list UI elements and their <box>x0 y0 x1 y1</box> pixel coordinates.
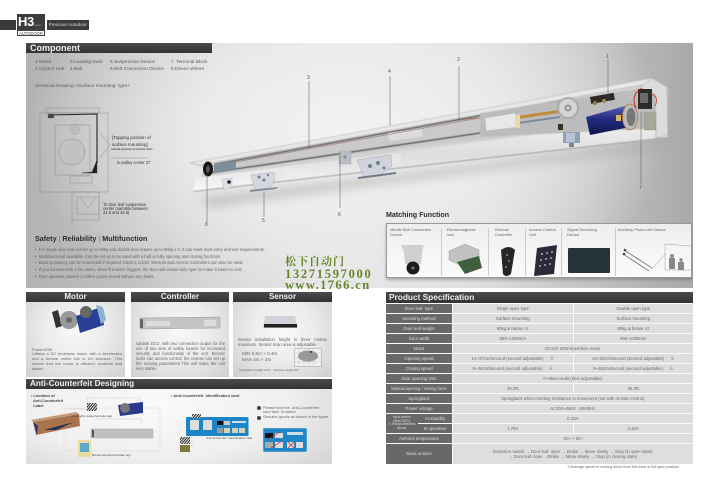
table: product specification: DC24V 60W brushless motor <box>545 346 601 351</box>
table: product specification: Door opening time <box>401 376 437 381</box>
heading: motor <box>26 292 125 302</box>
bracket 5 <box>250 171 284 192</box>
diagram: label locations <box>31 398 160 457</box>
table: product specification: ※ except detection sensor <box>388 422 415 430</box>
door leaf note: To door leaf suspension <box>103 202 146 207</box>
watermark: www.1766.cn <box>285 278 371 292</box>
table: product specification: Closing speed <box>405 366 433 371</box>
heading: safety: Safety | Reliability | Multifunction <box>35 234 147 243</box>
text: bi-color: Bi-color layering Anti-fake sign <box>92 452 131 456</box>
number labels: 8 <box>205 222 208 228</box>
feature bullets: • Multifunctional available. Can be set up to be used with a half or fully opening and closing functions. <box>35 254 221 259</box>
text: sensor range <box>242 351 277 362</box>
heading: controller: Controller <box>161 292 199 301</box>
text: sensor range: MIN 0.5m × 0.4m <box>242 351 277 356</box>
table: product specification: Single open type <box>497 306 529 311</box>
feature bullets: • Door operator passed 1 million cycles tested without any faults. <box>35 274 155 279</box>
table: product specification: Motor <box>414 346 424 351</box>
panel: matching function: Access Control <box>529 227 556 232</box>
table: product specification: In operation <box>424 426 446 431</box>
text: installation height: Installation height:2.2m Antenna angle:30° <box>239 368 299 372</box>
panel: controller <box>131 292 229 377</box>
table: product specification: Detection switch → Door leaf open → Brake → Move slowly → Stop (in open state) <box>493 449 653 454</box>
number labels <box>205 54 642 228</box>
panel: matching function: Remote <box>495 227 509 232</box>
table: product specification: 30.3N <box>507 386 518 391</box>
panel: matching function: Controller <box>495 232 512 237</box>
panel: matching function: Device <box>567 232 579 237</box>
table: product specification: 9~30cm/Second (second adjustable) ※ <box>593 366 673 371</box>
bracket 6 <box>339 151 351 164</box>
text: motor: Utilises a DC brushless motor, with a decelerator and a turbine vortex bar in it's structure. This means that the motor is efficient, powerful and stable. <box>32 351 122 371</box>
panel: matching function: Signal Receiving <box>567 227 597 232</box>
table: product specification: -20~ + 50~ <box>562 436 583 441</box>
table: product specification: 1.76A <box>507 426 518 431</box>
header badge <box>0 14 89 36</box>
number labels: 3 <box>307 75 310 81</box>
door leaf note <box>103 202 148 215</box>
watermark: 松下自动门 <box>285 256 345 268</box>
text: identification card title: • Anti-Counterfeit Identification card <box>171 392 239 398</box>
table: product specification: At standby <box>425 416 445 421</box>
table: product specification: Door leaf type <box>405 306 433 311</box>
table: product specification: 900~1265mm <box>500 336 526 341</box>
table: product specification: Basic actions <box>406 451 432 456</box>
table: product specification: 14~37cm/Second (second adjustable) ※ <box>471 356 554 361</box>
bracket suspension <box>357 154 401 179</box>
text: card instructions: Please hold the Anti-Counterfeit <box>263 404 319 410</box>
table: product specification: Surface mounting <box>496 316 530 321</box>
parts list: 8 Driven Wheel <box>171 67 204 72</box>
watermark <box>285 256 372 292</box>
number labels: 1 <box>606 54 609 60</box>
table: product specification: Surface mounting <box>616 316 650 321</box>
number labels: 2 <box>457 57 460 63</box>
feature bullets: • If you connect with a fire alarm, when fire alarm triggers, the door will remain fully open to make it easier to exit. <box>35 267 242 272</box>
sectional drawing <box>40 108 154 226</box>
driven wheel <box>203 161 236 190</box>
heading: component: Component <box>30 43 80 53</box>
parts list: 5 Suspension Device <box>110 60 155 65</box>
table: product specification: 0.23A <box>567 416 578 421</box>
parts list: 4 Belt <box>70 67 82 72</box>
text: motor: Power:60W <box>32 346 52 352</box>
heading: motor: Motor <box>64 292 87 301</box>
parts list: 6 Belt Connection Device <box>110 67 164 72</box>
control strip <box>388 109 565 141</box>
number labels: 4 <box>388 69 391 75</box>
heading: anti-counterfeit: Anti-Counterfeit Designing <box>30 379 134 388</box>
table: product specification: Springback <box>408 396 430 401</box>
heading: product specification: Product Specification <box>389 292 474 302</box>
panel: matching function: lock <box>447 232 454 237</box>
sectional drawing title: Sectional Drawing <Surface mounting type> <box>35 84 130 89</box>
table: product specification: 90kg & below ×1 <box>497 326 529 331</box>
header badge: AUTODOOR <box>19 31 43 36</box>
tapping note <box>112 135 151 147</box>
number labels: 7 <box>639 185 642 191</box>
table: product specification: Ambient temperature <box>399 436 439 441</box>
heading: sensor <box>233 292 332 302</box>
table: product specification: 9~35cm/Second (second adjustable) ※ <box>473 366 553 371</box>
text: card caption: Anti-Counterfeit Identification card <box>206 436 252 440</box>
text: sensor: Sensor installation height is three metres maximum. Sensor scan area is adjustable. <box>238 336 327 347</box>
panel: sensor <box>233 292 332 377</box>
table: product specification: Mounting method <box>402 316 436 321</box>
icon: sensor <box>263 316 298 328</box>
door leaf note: 21.5 and 32.5) <box>103 210 129 215</box>
panel: anti-counterfeit <box>26 389 332 464</box>
text: location of label: • Location of <box>31 392 55 398</box>
table: product specification: 2.40A <box>628 426 639 431</box>
table: product specification <box>386 304 693 464</box>
watermark: 13271597000 <box>285 266 372 280</box>
table: product specification: Power voltage <box>405 406 433 411</box>
text: card instructions: card face to watch <box>263 409 296 414</box>
table: product specification: Springback when meeting resistance in movement (set with remote control) <box>501 396 644 401</box>
icon: motor <box>52 305 106 333</box>
text: holographic: Holography image Anti-fake sign <box>70 414 112 418</box>
text: location of label: Label <box>33 403 43 408</box>
belt accent <box>225 118 480 164</box>
table: product specification: Input current (@AC200V) <box>393 415 411 423</box>
parts list: 3 Leading track <box>70 60 103 65</box>
number labels: 6 <box>338 212 341 218</box>
panel: matching function: Auxiliary Photo-cell Sensor <box>618 227 666 232</box>
panel: component <box>26 43 693 288</box>
text: controller: Update DCU, with two connection output for the use of two sets of safety beams for increased security and functionality of the unit. Electric locks can access control, the remote can set up the running parameters.This will make the unit very stable. <box>136 341 225 371</box>
heading: product specification <box>386 292 693 302</box>
table: product specification: Manual opening / closing force <box>391 386 447 391</box>
number labels: 5 <box>262 218 265 224</box>
panel: anti-counterfeit: Genuine goods as shown in the figure <box>263 414 328 419</box>
icon: controller <box>140 316 220 330</box>
header badge: H3 series <box>18 14 41 29</box>
panel: matching function: Electromagnetic <box>447 227 476 232</box>
text: location of label <box>31 392 63 408</box>
table: product specification: → Door leaf close →Brake → Move slowly → Stop (in closing state) <box>508 454 637 459</box>
table: product specification: 90kg & below ×2 <box>617 326 649 331</box>
panel: matching function: Unit <box>529 232 536 237</box>
table: product specification: Door width <box>409 336 429 341</box>
feature bullets: • For single door leaf can be up to 90kg and double door leaves up to 90kg x 2. It can meet most entry and exit requirements. <box>35 247 265 252</box>
text: sensor range: MAX 4m × 2m <box>242 356 271 362</box>
table: product specification: Opening speed <box>404 356 434 361</box>
heading: sensor: Sensor <box>269 292 296 301</box>
panel: motor <box>26 292 125 377</box>
text: location of label: Anti-Counterfeit <box>33 398 63 403</box>
diagram: identification cards <box>180 406 307 452</box>
table: product specification: AC200~250V 50/60Hz <box>550 406 595 411</box>
chart: sensor scan area <box>294 348 322 367</box>
parts list: 2 Control Unit <box>35 67 64 72</box>
table: product specification: 900~1265mm <box>620 336 646 341</box>
panel: matching function <box>386 223 692 278</box>
parts list <box>35 60 208 72</box>
heading: controller <box>131 292 229 302</box>
door leaf note: center (variable between <box>103 206 148 211</box>
heading: matching function: Matching Function <box>386 211 449 219</box>
parts list: 7 Terminal Block <box>171 60 207 65</box>
table: product specification: 0~95seconds (time adjustable) <box>543 376 602 381</box>
feature bullets <box>35 247 265 279</box>
control board <box>634 88 657 130</box>
bracket near motor <box>563 132 580 147</box>
panel: matching function: Device <box>390 232 402 237</box>
leader lines <box>207 60 641 222</box>
panel: matching function: Middle Belt Connection <box>390 227 431 232</box>
matching icons <box>401 244 690 276</box>
table: product specification: Door leaf weight <box>403 326 435 331</box>
footnote: ※Average speed in moving 60cm from full close or full open position. <box>567 465 680 469</box>
header badge: Precious Autodoor <box>49 22 87 27</box>
tapping note: surface mounting] <box>112 142 148 147</box>
screw spacing note: Lateral spacing of screws: 400 <box>111 147 152 151</box>
heading: component <box>26 43 212 53</box>
pulley <box>557 93 615 130</box>
heading: anti-counterfeit <box>26 379 332 389</box>
feature bullets: • Back up battery can be connected if required. Electric Locks, Sensors and Access Controllers can also be used. <box>35 260 243 265</box>
table: product specification: 14~32cm/Second (second adjustable) ※ <box>592 356 675 361</box>
table: product specification: Double open type <box>616 306 650 311</box>
pulley note: to pulley center 27 <box>117 160 150 165</box>
motor <box>586 104 638 135</box>
tapping note: [Tapping position of <box>112 135 151 140</box>
text: card instructions <box>263 404 328 419</box>
parts list: 1 Motor <box>35 60 51 65</box>
table: product specification: 36.3N <box>628 386 639 391</box>
